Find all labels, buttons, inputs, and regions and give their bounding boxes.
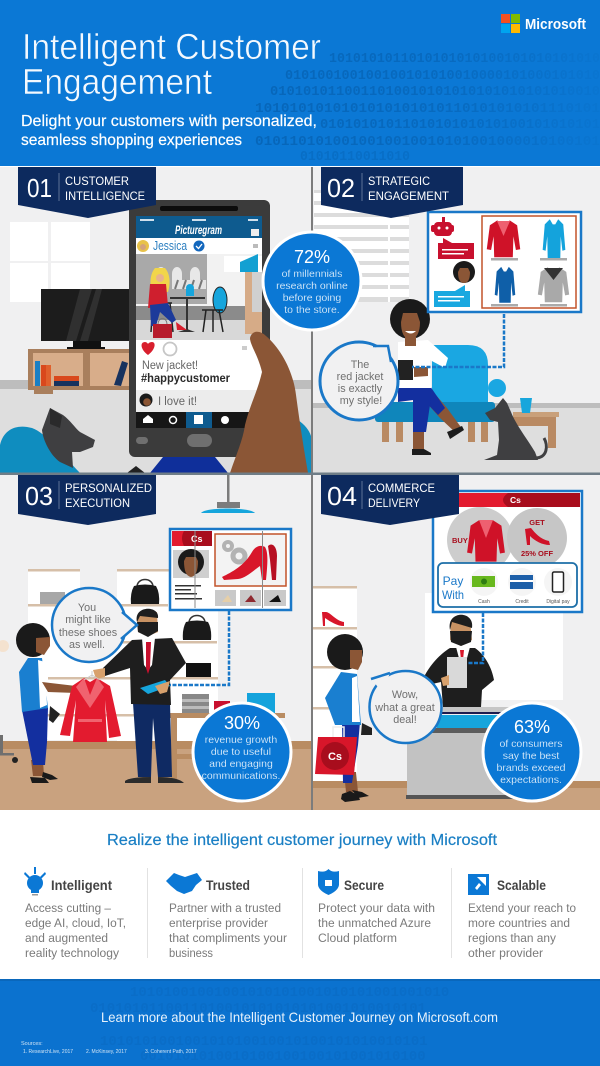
stat: 72 percent — [263, 232, 361, 330]
binary pattern: 101010100100101010010010100101010010101 — [100, 1034, 428, 1050]
column: scalable: other provider — [468, 946, 543, 960]
far lower leg — [424, 388, 463, 434]
stat: 30 percent: and engaging — [209, 758, 273, 770]
torso — [398, 340, 448, 388]
column: trusted: Trusted — [206, 878, 250, 893]
phone buttons — [187, 434, 212, 447]
badge 01: CUSTOMER — [65, 174, 129, 188]
window blinds — [314, 190, 409, 302]
pay with box: Pay — [443, 574, 463, 588]
column: trusted — [166, 873, 287, 960]
icon: light bulb — [24, 867, 46, 896]
footer band — [0, 979, 600, 1066]
column: intelligent: and augmented — [25, 931, 108, 945]
store floor — [0, 741, 311, 810]
near leg — [413, 430, 424, 450]
wall base and floor — [0, 380, 311, 473]
side table with cup — [513, 398, 559, 448]
section heading: Realize the intelligent customer journey with Microsoft — [107, 832, 498, 849]
pay with box: Credit — [515, 599, 529, 605]
badge 04: 04 — [327, 481, 357, 511]
binary pattern — [90, 985, 449, 1065]
pay with box: With — [442, 588, 464, 602]
sources: Sources: — [21, 1041, 43, 1047]
speech bubble: is exactly — [338, 383, 383, 395]
binary pattern: 0101010101101010101010100101010101 — [320, 117, 600, 133]
woman seated — [390, 299, 464, 455]
badge 03: 03 — [25, 481, 53, 511]
stat: 63 percent: brands exceed — [497, 762, 566, 774]
column: trusted: that compliments your — [169, 931, 287, 945]
pay with box: Cash — [478, 599, 490, 605]
badge 04: DELIVERY — [368, 496, 420, 510]
stat: 72 percent: 72% — [294, 247, 330, 267]
clerk — [424, 615, 494, 707]
stat: 30 percent: revenue growth — [205, 734, 277, 746]
stat: 30 percent: communications. — [202, 770, 280, 782]
teal coat — [543, 219, 565, 258]
sources: 1. ResearchLive, 2017 — [23, 1049, 73, 1055]
shoe recommendation card: Cs — [191, 534, 203, 544]
speech bubble: as well. — [69, 639, 105, 651]
speech bubble: what a great — [374, 702, 435, 714]
badge 03 — [18, 475, 156, 525]
binary pattern: 0101101010010010010010101001000010100101 — [255, 134, 600, 150]
speech bubble: deal! — [393, 714, 417, 726]
phone screen — [136, 216, 262, 412]
badge 03: EXECUTION — [65, 496, 130, 510]
call to action: Learn more about the Intelligent Customer Journey on Microsoft.com — [101, 1009, 498, 1025]
display shelves — [28, 569, 218, 741]
column: trusted: business — [169, 946, 213, 960]
ceiling lamp — [201, 475, 255, 513]
speech bubble: The — [351, 359, 369, 371]
panel: 03 personalized execution — [0, 475, 311, 810]
Microsoft logo — [501, 14, 586, 33]
pants at bottom — [127, 457, 228, 473]
binary pattern: 0101010110011010010101010101010101010010 — [270, 84, 600, 100]
stat: 63 percent: expectations. — [500, 774, 562, 786]
discount offer — [507, 508, 567, 568]
buy offer — [447, 507, 513, 573]
dog — [42, 408, 95, 468]
couch arm — [0, 427, 80, 473]
app header — [136, 216, 262, 238]
speech bubble — [370, 671, 442, 743]
column: intelligent — [24, 867, 126, 960]
pay with box — [438, 563, 577, 607]
subtitle: seamless shopping experiences — [21, 132, 242, 149]
speech bubble — [320, 342, 398, 420]
binary pattern: 01010110011010 — [300, 149, 410, 165]
column: secure — [318, 869, 435, 945]
mannequin and stool — [0, 640, 18, 763]
product card — [428, 212, 581, 312]
buy offer: BUY — [452, 536, 468, 545]
stat: 30 percent: 30% — [224, 713, 260, 733]
title — [22, 26, 321, 102]
column: trusted: Partner with a trusted — [169, 901, 281, 915]
title: Intelligent Customer — [22, 26, 321, 67]
counter — [406, 707, 522, 799]
user row: Jessica — [153, 239, 187, 253]
stat: 72 percent: research online — [276, 280, 348, 292]
Microsoft logo: Microsoft — [525, 17, 586, 33]
pay with box: Digital pay — [546, 599, 570, 605]
column: scalable — [468, 874, 576, 960]
robot icon — [431, 217, 454, 236]
offer card: Cs — [510, 495, 521, 505]
shoe recommendation card — [170, 529, 291, 610]
panel: 04 commerce delivery — [313, 475, 600, 810]
column: trusted: enterprise provider — [169, 916, 268, 930]
nav bar — [136, 412, 262, 428]
column: scalable: more countries and — [468, 916, 570, 930]
man — [93, 609, 186, 783]
store floor — [313, 781, 600, 810]
comment row — [136, 390, 262, 412]
badge 03: PERSONALIZED — [65, 481, 152, 495]
left shelves — [313, 586, 357, 781]
photo — [136, 254, 262, 340]
dashed connector — [412, 314, 504, 367]
panel: 01 customer intelligence — [0, 167, 311, 473]
sofa — [375, 345, 506, 442]
gray coat — [538, 267, 569, 302]
column: intelligent: Access cutting – — [25, 901, 111, 915]
stat: 30 percent — [193, 703, 291, 801]
dog — [484, 398, 546, 460]
column: secure: Cloud platform — [318, 931, 397, 945]
column: intelligent: edge AI, cloud, IoT, — [25, 916, 126, 930]
phone: #happycustomer — [141, 371, 230, 385]
badge 01: 01 — [27, 173, 52, 203]
discount offer: 25% OFF — [521, 549, 553, 558]
column: scalable: Extend your reach to — [468, 901, 576, 915]
blue coat — [495, 267, 515, 303]
woman with bag — [315, 634, 372, 802]
clothing table — [170, 693, 285, 780]
column: secure: the unmatched Azure — [318, 916, 431, 930]
subtitle: Delight your customers with personalized, — [21, 113, 317, 130]
stat: 63 percent — [483, 703, 581, 801]
app header: Picturegram — [175, 223, 222, 237]
icon: shield — [318, 869, 339, 895]
customer chat bubble — [434, 285, 470, 307]
header band — [0, 0, 600, 166]
post caption: New jacket! — [142, 360, 198, 372]
stat: 72 percent: to the store. — [284, 304, 340, 316]
badge 02: ENGAGEMENT — [368, 189, 450, 203]
column: scalable: Scalable — [497, 878, 546, 893]
stat: 30 percent: due to useful — [211, 746, 271, 758]
column: secure: Protect your data with — [318, 901, 435, 915]
binary pattern — [255, 51, 600, 165]
badge 01: INTELLIGENCE — [65, 189, 145, 203]
sources — [21, 1041, 197, 1055]
white back wall — [425, 593, 563, 700]
title: Engagement — [22, 61, 212, 102]
shopping bag: Cs — [328, 751, 342, 763]
speech bubble: my style! — [340, 395, 382, 407]
column: intelligent: reality technology — [25, 946, 120, 960]
red jacket on hanger — [60, 671, 121, 742]
badge 02 — [321, 167, 463, 218]
woman — [16, 623, 76, 783]
teal sleeve right — [298, 420, 311, 473]
column dividers — [147, 868, 452, 958]
shopping bag — [315, 727, 357, 775]
wall base and floor — [311, 403, 600, 473]
stat: 63 percent: 63% — [514, 717, 550, 737]
badge 04: COMMERCE — [368, 481, 435, 495]
panel dividers — [0, 167, 600, 810]
badge 01 — [18, 167, 156, 218]
likes row — [142, 342, 247, 356]
badge 04 — [321, 475, 459, 525]
badge 02: 02 — [327, 173, 355, 203]
speech bubble: red jacket — [337, 371, 383, 383]
hand — [230, 332, 308, 473]
column: intelligent: Intelligent — [51, 878, 112, 893]
stat: 72 percent: of millennials — [282, 268, 342, 280]
speech bubble: these shoes — [59, 627, 118, 639]
sources: 2. McKinsey, 2017 — [86, 1049, 127, 1055]
speech bubble — [52, 588, 137, 662]
icon: scale arrow box — [468, 874, 489, 895]
icon: handshake — [166, 873, 202, 894]
sources: 3. Coherent Path, 2017 — [145, 1049, 197, 1055]
speech bubble: You — [78, 602, 96, 614]
stat: 72 percent: before going — [283, 292, 341, 304]
stat: 63 percent: say the best — [503, 750, 559, 762]
comment row: I love it! — [158, 396, 197, 408]
customer face — [453, 261, 475, 283]
binary pattern: 0010101010010100100100101001010100 — [140, 1049, 426, 1065]
window — [10, 222, 90, 302]
subtitle — [21, 113, 317, 149]
panel: 02 strategic engagement — [311, 167, 600, 473]
column: secure: Secure — [344, 878, 384, 893]
user row — [137, 239, 258, 253]
column: scalable: regions than any — [468, 931, 557, 945]
discount offer: GET — [529, 518, 545, 527]
hangers bars — [491, 258, 567, 306]
bookshelf — [28, 349, 133, 394]
speech bubble: might like — [65, 614, 111, 626]
binary pattern: 1010101010101010101010110101010101110101 — [255, 101, 600, 117]
dashed connector — [467, 613, 483, 663]
stat: 63 percent: of consumers — [499, 738, 563, 750]
badge 02: STRATEGIC — [368, 174, 430, 188]
binary pattern: 0101010110011010010101010101001010010101 — [90, 1001, 426, 1017]
bot chat bubble — [438, 238, 474, 259]
binary pattern: 10101001001001010101001010101001001010 — [130, 985, 449, 1001]
phone — [129, 200, 270, 457]
red jacket — [487, 220, 520, 257]
television — [41, 289, 133, 349]
offer card — [433, 491, 582, 612]
dashed connector — [170, 611, 229, 685]
speech bubble: Wow, — [392, 689, 418, 701]
